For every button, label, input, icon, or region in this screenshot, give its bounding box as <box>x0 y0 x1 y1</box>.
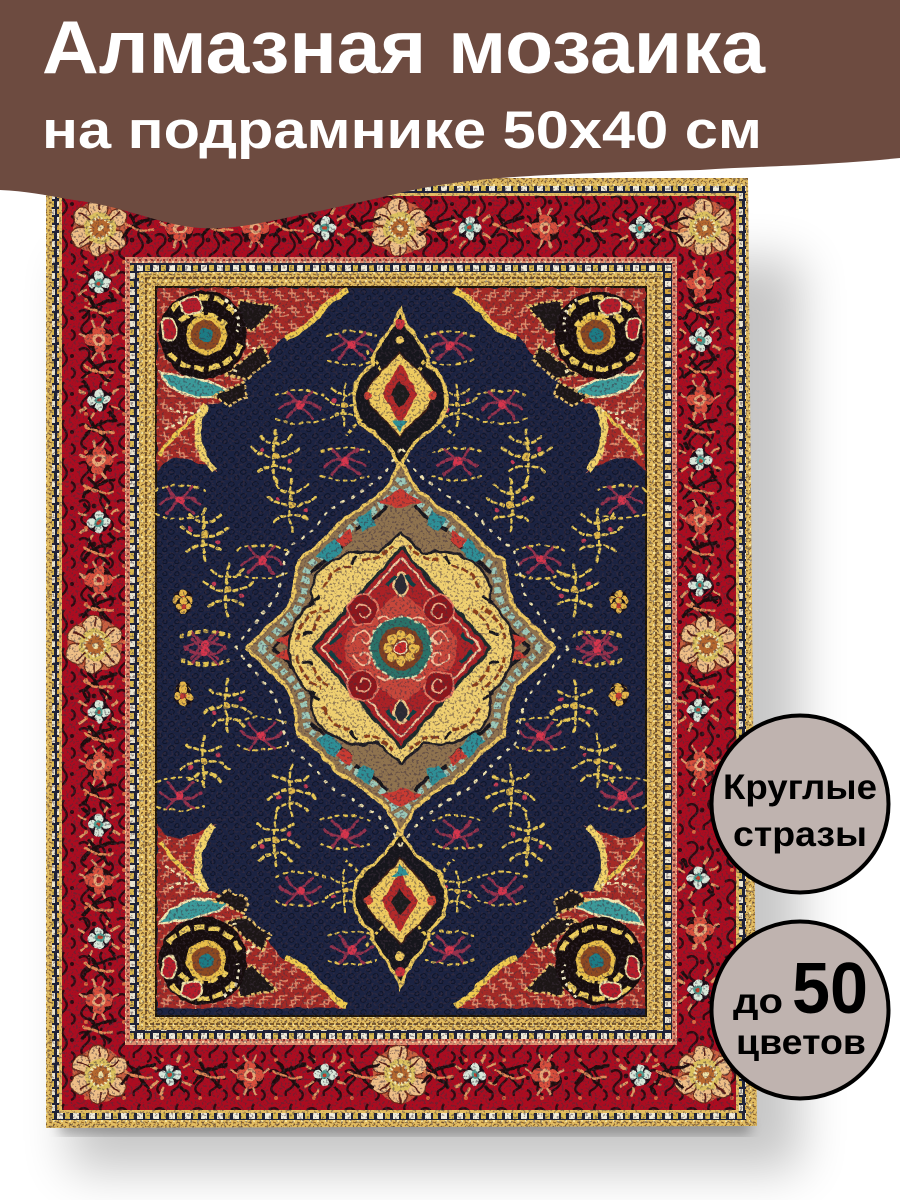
inner gold frame <box>139 272 663 1030</box>
inner bead frame <box>130 263 672 1039</box>
title: Алмазная мозаика <box>42 5 766 89</box>
corner spandrels and field sprigs <box>156 288 646 1008</box>
subtitle: на подрамнике 50х40 см <box>42 101 762 160</box>
outer bead border <box>52 186 746 1120</box>
canvas drop shadow <box>60 260 800 1170</box>
thin gold line <box>59 193 739 1113</box>
header banner <box>0 0 900 228</box>
badge: up to 50 colours: до <box>733 982 783 1021</box>
border flowers <box>66 198 735 1103</box>
outer gold edge <box>46 178 757 1128</box>
fine stitch texture <box>46 178 758 1130</box>
badge: up to 50 colours: 50 <box>792 949 868 1029</box>
gold frame fine line <box>146 278 656 1024</box>
red floral border <box>62 196 736 1110</box>
badge: round rhinestones: стразы <box>733 815 867 854</box>
badge: round rhinestones: Круглые <box>723 768 877 807</box>
badge: up to 50 colours <box>712 922 888 1098</box>
badge: up to 50 colours: цветов <box>736 1023 866 1062</box>
central medallion <box>235 448 567 848</box>
rug artwork <box>46 178 758 1130</box>
inner salmon frame <box>125 257 677 1045</box>
badge: round rhinestones <box>712 716 888 892</box>
navy field <box>156 287 646 1016</box>
